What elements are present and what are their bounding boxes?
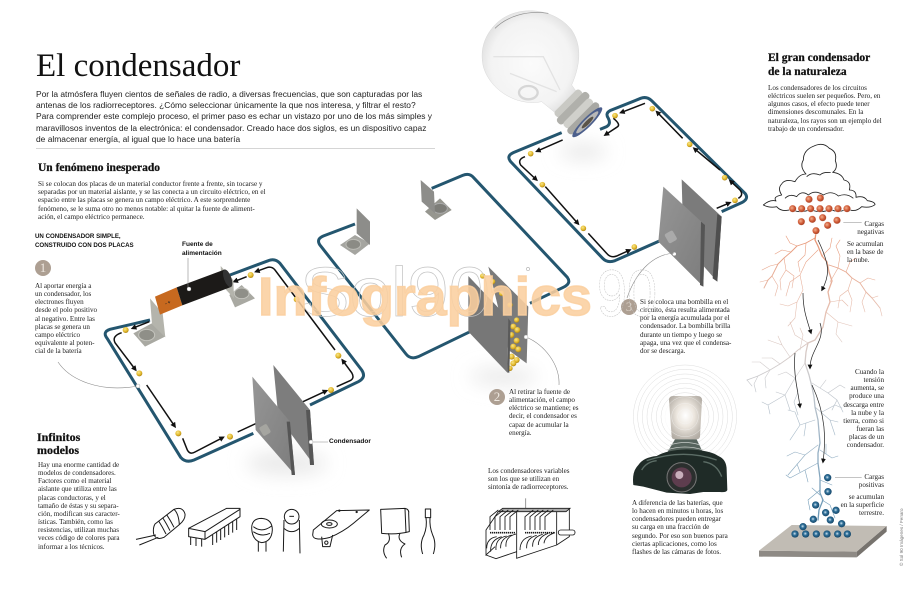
step 2 text: energía. [509, 429, 532, 437]
step 1 text: desde el polo positivo [35, 306, 97, 314]
text: accumulate at cloud base: Se acumulan [847, 240, 883, 248]
subheading: simple capacitor: CONSTRUIDO CON DOS PLACAS [35, 242, 134, 249]
step 2 number: 2 [494, 389, 500, 404]
text: Infinitos modelos: resistencias, utilizan muchas [38, 526, 119, 534]
leader lines and anchor dots [58, 253, 674, 442]
text: discharge: produce una [849, 392, 884, 400]
text: discharge: Cuando la [855, 368, 884, 376]
right bracket [229, 285, 255, 307]
step 2 text: eléctrico se mantiene; es [509, 404, 579, 412]
watermark: Sol90 [300, 253, 490, 331]
watermark: 90 [597, 256, 657, 330]
step 3 number: 3 [626, 299, 632, 314]
text: discharge: tierra, como si [843, 417, 884, 425]
title: El condensador [36, 48, 240, 84]
tantalum bead [252, 518, 272, 552]
watermark: Infographics [258, 267, 592, 327]
intro text: Para comprender este complejo proceso, el primer paso es echar un vistazo por uno de los más simples y [36, 111, 432, 121]
subheading: simple capacitor [35, 233, 134, 249]
text: camera flash: segundo. Por eso son buenos para [632, 532, 728, 540]
text: accumulate on ground: terrestre. [859, 509, 884, 517]
text: discharge: la nube y la [851, 409, 884, 417]
step 1 text: placas se genera un [35, 323, 90, 331]
box film [381, 508, 409, 558]
text: Infinitos modelos: veces código de colores para [38, 534, 120, 542]
text: variable capacitors: Los condensadores variables [488, 467, 570, 475]
step 2 number [489, 389, 505, 405]
step 3 text: circuito, ésta resulta alimentada [640, 306, 730, 314]
circuit 1: simple capacitor with battery [105, 260, 364, 475]
label: negative charges: Cargas [864, 220, 884, 228]
step 3 text: apaga, una vez que el condensa- [640, 339, 731, 347]
step 1 text: campo eléctrico [35, 331, 80, 339]
heading: Infinitos modelos [37, 430, 80, 457]
camera body [633, 449, 727, 494]
circuit 2: charged capacitor without source [319, 174, 569, 385]
text: accumulate on ground: en la superficie [841, 501, 884, 509]
circuit 3: capacitor lighting a bulb [482, 11, 747, 287]
step 3 text [640, 298, 732, 355]
stored charges [480, 273, 521, 371]
intro text: maravillosos inventos de la electrónica: el condensador. Creado hace dos siglos, es un dispositivo capaz [36, 123, 426, 133]
step 1 text: Al aportar energía a [35, 282, 91, 290]
text: accumulate at cloud base [847, 240, 884, 264]
step 3 text: durante un tiempo y luego se [640, 331, 722, 339]
text: camera flash: A diferencia de las baterías, que [632, 499, 723, 507]
intro text [36, 89, 432, 144]
step 1 text: al negativo. Entre las [35, 315, 95, 323]
text: Infinitos modelos: tamaño de éstas y su separa- [38, 502, 119, 510]
bracket A [340, 235, 370, 255]
step 2 text: Al retirar la fuente de [509, 388, 570, 396]
step 2 text: capaz de acumular la [509, 421, 569, 429]
text: variable capacitors: son los que se utilizan en [488, 475, 559, 483]
label: power source [182, 241, 222, 257]
storm cloud [763, 144, 875, 234]
step 1 text: electrones fluyen [35, 298, 84, 306]
heading: nature's capacitor [768, 52, 870, 78]
step 1 number: 1 [40, 260, 46, 275]
label: positive charges [858, 473, 884, 489]
text: discharge: fueran las [856, 425, 884, 433]
text: accumulate on ground: se acumulan [849, 493, 884, 501]
text: nature's capacitor: eléctricos suelen ser pequeños. Pero, en [768, 92, 880, 100]
text: camera flash: condensadores pueden entregar [632, 515, 721, 523]
ceramic disc [283, 509, 300, 553]
subheading: simple capacitor: UN CONDENSADOR SIMPLE, [35, 233, 121, 240]
text: variable capacitors: sintonía de radiorreceptores. [488, 483, 569, 491]
plates [682, 179, 722, 282]
text: discharge [843, 368, 884, 449]
heading: nature's capacitor: El gran condensador [768, 52, 870, 64]
step 1 text: cial de la batería [35, 347, 82, 355]
text: Infinitos modelos: ísticas. También, como las [38, 518, 113, 526]
text: nature's capacitor: algunos casos, el efecto puede tener [768, 100, 870, 108]
heading: Un fenómeno inesperado: Un fenómeno inesperado [38, 162, 160, 174]
lens [667, 463, 696, 492]
text: Infinitos modelos [38, 461, 120, 551]
text: discharge: tensión [864, 376, 884, 384]
electron path arrows [520, 103, 742, 257]
intro text: antenas de los radiorreceptores. ¿Cómo seleccionar únicamente la que nos interesa, y filtrar el resto? [36, 100, 416, 110]
bracket B [425, 198, 452, 220]
step 3 number [621, 299, 637, 315]
chassis mount [313, 510, 369, 547]
text: Infinitos modelos: modelos de condensadores. [38, 469, 116, 477]
bulb [482, 11, 605, 140]
lightning [747, 232, 882, 520]
text: camera flash [632, 499, 728, 556]
step 1 text: equivalente al poten- [35, 339, 94, 347]
back plate [488, 267, 528, 363]
text: camera flash: lo hacen en minutos u horas, los [632, 507, 723, 515]
heading: Infinitos modelos: Infinitos [37, 430, 80, 444]
film lead [421, 509, 435, 554]
step 1 number [35, 260, 51, 276]
step 3 text: por la energía acumulada por el [640, 314, 730, 322]
step 3 text: condensador. La bombilla brilla [640, 322, 730, 330]
intro text: de almacenar energía, al igual que lo hace una batería [36, 134, 240, 144]
flash head [669, 396, 702, 439]
text: Infinitos modelos: informar a los técnicos. [38, 543, 105, 551]
text: Infinitos modelos: aislante que utiliza entre las [38, 485, 117, 493]
capacitor plates [273, 365, 314, 465]
text: discharge: descarga entre [843, 401, 884, 409]
text: accumulate at cloud base: en la base de [847, 248, 883, 256]
text: Un fenómeno inesperado: ación, el campo eléctrico permanece. [38, 213, 145, 221]
variable capacitor drawing [486, 498, 575, 559]
cylinder electrolytic [136, 508, 185, 545]
ground plate with positive charges [759, 474, 887, 557]
electron path arrows [114, 267, 353, 453]
step 3 text: Si se coloca una bombilla en el [640, 298, 728, 306]
divider [36, 148, 435, 150]
text: Infinitos modelos: Hay una enorme cantidad de [38, 461, 119, 469]
text: nature's capacitor: dimensiones descomunales. En la [768, 108, 863, 116]
left bracket [133, 323, 165, 347]
text: nature's capacitor: Los condensadores de los circuitos [768, 84, 867, 92]
wire [509, 98, 747, 262]
text: Infinitos modelos: Factores como el material [38, 477, 111, 485]
label: positive charges: positivas [859, 481, 884, 489]
glass [482, 11, 580, 117]
negative charges [789, 194, 851, 234]
text: Un fenómeno inesperado: Si se colocan dos placas de un material conductor frente a frente, sin tocarse y [38, 180, 263, 188]
text: Un fenómeno inesperado: separadas por un material aislante, y se las conecta a un circuito eléctrico, en el [38, 188, 266, 196]
camera with flash [633, 365, 737, 494]
text: nature's capacitor: trabajo de un condensador. [768, 125, 844, 133]
label: negative charges: negativas [857, 228, 884, 236]
text: discharge: condensador. [847, 441, 884, 449]
text: accumulate at cloud base: la nube. [847, 256, 869, 264]
step 2 text: decir, el condensador es [509, 412, 577, 420]
text: camera flash: flashes de las cámaras de fotos. [632, 548, 721, 556]
intro text: Por la atmósfera fluyen cientos de señales de radio, a diversas frecuencias, que son capturadas por las [36, 89, 422, 99]
heading: nature's capacitor: de la naturaleza [768, 66, 847, 78]
label: capacitor: Condensador [329, 438, 371, 445]
text: nature's capacitor [768, 84, 882, 133]
electrons [528, 106, 738, 250]
front plate [468, 276, 508, 373]
label: power source: alimentación [182, 250, 222, 257]
text: nature's capacitor: naturaleza, los rayos son un ejemplo del [768, 117, 882, 125]
screw base [551, 86, 605, 140]
capacitor models drawings [136, 508, 435, 558]
text: discharge: placas de un [849, 433, 884, 441]
text: accumulate on ground [840, 493, 884, 517]
battery [155, 287, 182, 315]
step 1 text [35, 282, 97, 355]
circuit 1: simple capacitor with battery: - + [164, 299, 172, 306]
step 2 text [509, 388, 579, 437]
text: Un fenómeno inesperado: fenómeno, se le suma otro no menos notable: al quitar la fuente de aliment- [38, 205, 255, 213]
text: variable capacitors [488, 467, 570, 491]
text: Infinitos modelos: placas conductoras, y el [38, 494, 106, 502]
credit: © Sol 90 Imágenes / Fenaro [899, 508, 904, 566]
step 1 text: un condensador, los [35, 290, 91, 298]
electrons [123, 272, 341, 440]
label: positive charges: Cargas [864, 473, 884, 481]
label: power source: Fuente de [182, 241, 213, 248]
text: Un fenómeno inesperado: espacio entre las placas se genera un campo eléctrico. A este sorprendente [38, 196, 250, 204]
DIP integrated circuit [189, 508, 240, 547]
flash rings [633, 365, 737, 468]
text: Un fenómeno inesperado [38, 180, 266, 221]
text: Infinitos modelos: ción, modifican sus caracter- [38, 510, 120, 518]
step 2 text: alimentación, el campo [509, 396, 575, 404]
text: discharge: aumenta, se [851, 384, 884, 392]
text: camera flash: su carga en una fracción de [632, 523, 709, 531]
wire [319, 174, 569, 358]
heading: Infinitos modelos: modelos [37, 443, 79, 457]
text: camera flash: ciertas aplicaciones, como los [632, 540, 717, 548]
label: negative charges [857, 220, 884, 236]
wire [105, 260, 364, 461]
lightning arrows [795, 240, 828, 462]
step 3 text: dor se descarga. [640, 347, 685, 355]
